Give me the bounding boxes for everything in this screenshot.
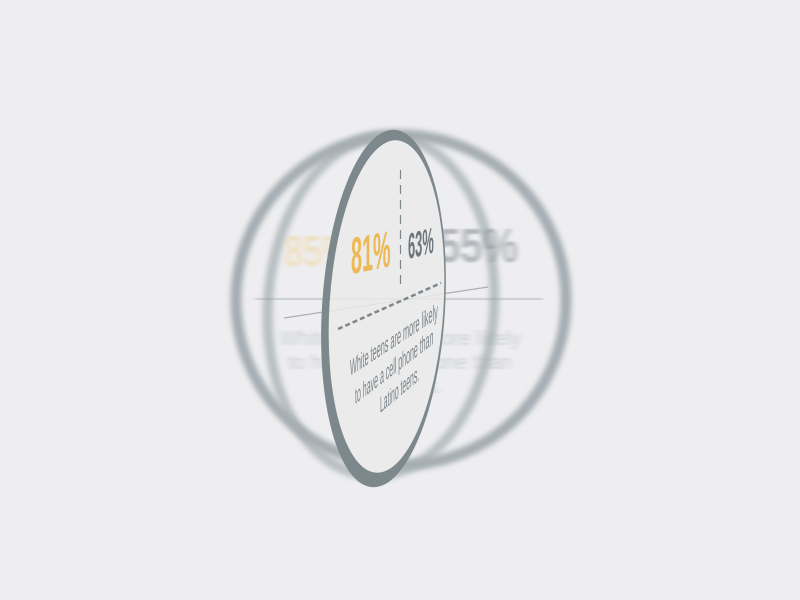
stat: 63%: 63% [408, 219, 434, 267]
ghost caption: to have a cell phone than [288, 352, 512, 374]
disc outer rim [311, 126, 456, 491]
ghost caption: White teens are more likely [279, 328, 521, 350]
ghost yellow percentage: 85% [284, 227, 352, 276]
ghost slanted rule [284, 287, 488, 318]
ghost horizontal rule [255, 298, 543, 300]
caption line 2: to have a cell phone than [355, 324, 433, 409]
ghost gray percentage: 55% [438, 220, 518, 273]
infographic: rotating disc showing teen cell phone ownership [228, 126, 574, 488]
ghost caption: Latino teens. [328, 376, 442, 398]
stat: 81%: 81% [351, 221, 391, 286]
dashed slanted divider [338, 283, 441, 329]
ghost ring: outer [236, 135, 566, 465]
caption line 3: Latino teens. [380, 360, 419, 418]
ghost ring: inner [256, 129, 506, 483]
faint ghost rules seen through the disc [330, 294, 444, 312]
vertical dashed divider [400, 170, 402, 288]
ghost frames: motion-blurred rings [236, 129, 566, 483]
ghost caption [279, 328, 521, 398]
main disc [321, 130, 446, 488]
caption [350, 298, 438, 418]
caption line 1: White teens are more likely [350, 298, 438, 381]
ghost content: blurred text and rules [255, 220, 543, 398]
disc face [319, 137, 454, 476]
